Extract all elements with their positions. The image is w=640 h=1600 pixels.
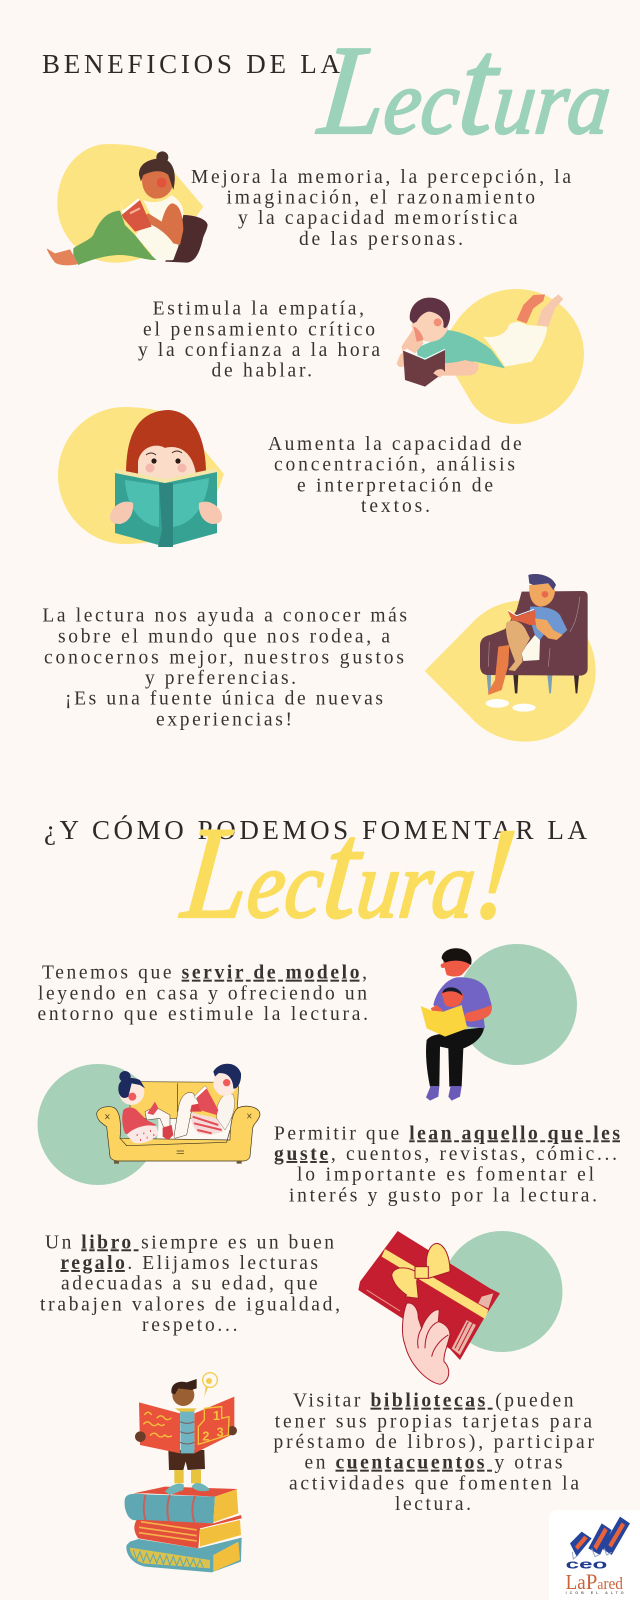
- text block: benefit 3: [268, 434, 522, 517]
- text block: benefit 2: y la confianza a la hora: [138, 340, 380, 361]
- text block: benefit 3: e interpretación de: [297, 475, 493, 496]
- text block: tip 3: [40, 1232, 340, 1336]
- logo: CEO La Pared: LaPared: [566, 1569, 624, 1594]
- text block: benefit 4: La lectura nos ayuda a conocer más: [42, 606, 407, 627]
- panel: tip 4 illustration, boy on stack of books: [125, 1373, 242, 1572]
- text block: tip 4: lectura.: [395, 1494, 471, 1515]
- text block: tip 1: Tenemos que servir de modelo,: [42, 963, 367, 984]
- text block: tip 4: [274, 1391, 594, 1515]
- text block: tip 3: trabajen valores de igualdad,: [40, 1294, 340, 1315]
- logo: CEO La Pared: ceo: [566, 1557, 607, 1572]
- heading script: Lectura!: Lectura!: [175, 793, 523, 948]
- text block: tip 1: entorno que estimule la lectura.: [38, 1004, 368, 1025]
- text block: tip 2: interés y gusto por la lectura.: [289, 1185, 597, 1206]
- title script: Lectura: Lectura: [312, 9, 620, 164]
- text block: benefit 4: conocernos mejor, nuestros gustos: [44, 647, 404, 668]
- text block: benefit 1: imaginación, el razonamiento: [226, 188, 535, 208]
- text block: tip 2: lo importante es fomentar el: [297, 1165, 595, 1186]
- text block: tip 3: adecuadas a su edad, que: [61, 1274, 318, 1295]
- text block: tip 2: [274, 1123, 620, 1206]
- text block: tip 4: en cuentacuentos y otras: [304, 1453, 562, 1474]
- text block: benefit 1: [191, 167, 571, 250]
- text block: tip 3: Un libro siempre es un buen: [45, 1232, 334, 1253]
- logo: CEO La Pared: ICOB EL ALTO: [566, 1591, 624, 1595]
- text block: tip 1: [38, 963, 368, 1025]
- text block: benefit 1: Mejora la memoria, la percepción, la: [191, 167, 571, 188]
- panel: tip 2 illustration, two kids on sofa: [38, 1064, 260, 1185]
- text block: benefit 2: el pensamiento crítico: [143, 319, 375, 340]
- text block: benefit 2: de hablar.: [212, 361, 312, 382]
- panel: tip 4 illustration, boy on stack of books: 2: [202, 1429, 209, 1443]
- text block: benefit 1: y la capacidad memorística: [238, 208, 518, 229]
- panel: tip 1 illustration, parent and child reading: [421, 944, 577, 1101]
- text block: benefit 1: de las personas.: [299, 229, 463, 250]
- text block: benefit 4: sobre el mundo que nos rodea, a: [58, 626, 390, 647]
- text block: tip 1: leyendo en casa y ofreciendo un: [38, 983, 367, 1004]
- text block: tip 3: respeto...: [142, 1315, 238, 1336]
- text block: tip 4: actividades que fomenten la: [289, 1473, 579, 1494]
- text block: benefit 2: Estimula la empatía,: [153, 299, 364, 320]
- heading: y como podemos fomentar la: ¿Y CÓMO PODEMOS FOMENTAR LA: [44, 815, 588, 845]
- panel: benefit 1 illustration, woman reading: [47, 144, 208, 265]
- panel: benefit 3 illustration, girl behind teal book: [58, 407, 224, 547]
- text block: tip 4: tener sus propias tarjetas para: [275, 1411, 592, 1432]
- text block: benefit 3: Aumenta la capacidad de: [268, 434, 522, 455]
- text block: benefit 4: [42, 606, 407, 730]
- text block: benefit 4: ¡Es una fuente única de nuevas: [65, 689, 383, 710]
- panel: tip 4 illustration, boy on stack of books: 3: [217, 1425, 224, 1439]
- logo: CEO La Pared: [549, 1510, 640, 1600]
- text block: tip 4: préstamo de libros), participar: [274, 1432, 594, 1453]
- panel: tip 3 illustration, gift book in hand: [358, 1231, 562, 1384]
- title: Beneficios de la: BENEFICIOS DE LA: [42, 49, 340, 79]
- text block: benefit 3: concentración, análisis: [274, 455, 515, 476]
- text block: tip 2: Permitir que lean aquello que les: [274, 1123, 620, 1144]
- text block: tip 2: guste, cuentos, revistas, cómic...: [274, 1144, 617, 1165]
- text block: benefit 3: textos.: [361, 496, 430, 517]
- text block: tip 4: Visitar bibliotecas (pueden: [293, 1391, 574, 1412]
- text block: benefit 2: [138, 299, 380, 382]
- panel: benefit 4 illustration, boy in armchair: [425, 574, 596, 742]
- panel: tip 4 illustration, boy on stack of books: 1: [213, 1409, 220, 1423]
- text block: benefit 4: y preferencias.: [145, 668, 296, 689]
- panel: benefit 2 illustration, boy lying with book: [397, 289, 584, 424]
- text block: benefit 4: experiencias!: [156, 709, 292, 730]
- text block: tip 3: regalo. Elijamos lecturas: [60, 1253, 318, 1274]
